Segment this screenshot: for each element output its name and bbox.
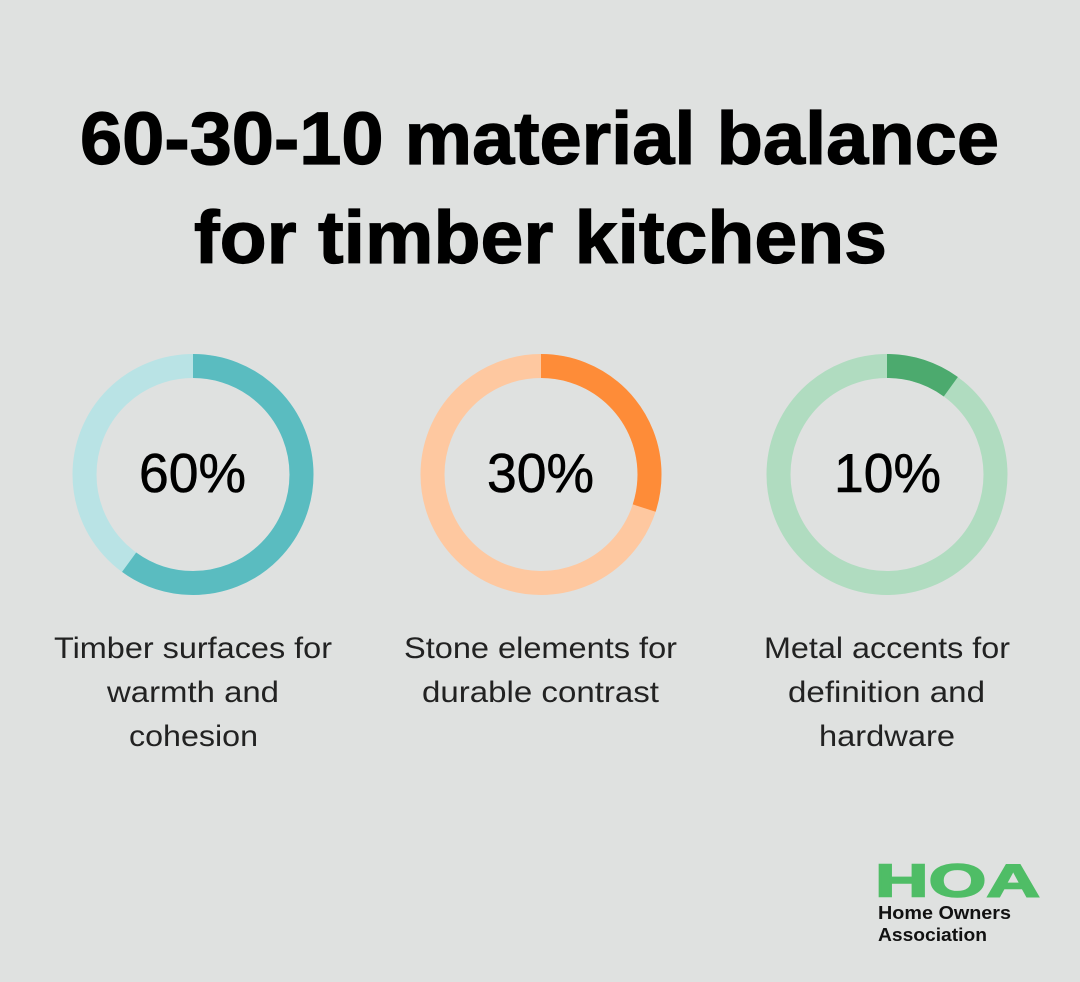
- description: metal: definition and: [788, 676, 985, 709]
- panel: 30% stone: [404, 366, 677, 709]
- value: 10%: 10%: [834, 442, 941, 504]
- donut chart: 10%: [778, 366, 996, 583]
- description: metal: hardware: [819, 720, 955, 753]
- logo: HOA Home Owners Association: HOA: [875, 854, 1040, 906]
- description: timber: [54, 632, 332, 753]
- description: stone: durable contrast: [422, 676, 660, 709]
- description: metal: [764, 632, 1010, 753]
- value: 60%: 60%: [139, 442, 246, 504]
- value: 30%: 30%: [487, 442, 594, 504]
- logo: HOA Home Owners Association: Home Owners: [878, 903, 1011, 923]
- title: [80, 97, 999, 279]
- logo: HOA Home Owners Association: [875, 854, 1040, 945]
- donut chart: 30%: [432, 366, 650, 583]
- description: timber: warmth and: [106, 676, 279, 709]
- panel: 10% metal: [764, 366, 1010, 753]
- description: stone: Stone elements for: [404, 632, 677, 665]
- description: timber: cohesion: [129, 720, 258, 753]
- panel: 60% timber: [54, 366, 332, 753]
- donut chart: 60%: [84, 366, 302, 583]
- description: stone: [404, 632, 677, 709]
- logo: HOA Home Owners Association: Association: [878, 925, 987, 945]
- title: for timber kitchens: [194, 196, 887, 279]
- description: timber: Timber surfaces for: [54, 632, 332, 665]
- title: 60-30-10 material balance: [80, 97, 999, 180]
- description: metal: Metal accents for: [764, 632, 1010, 665]
